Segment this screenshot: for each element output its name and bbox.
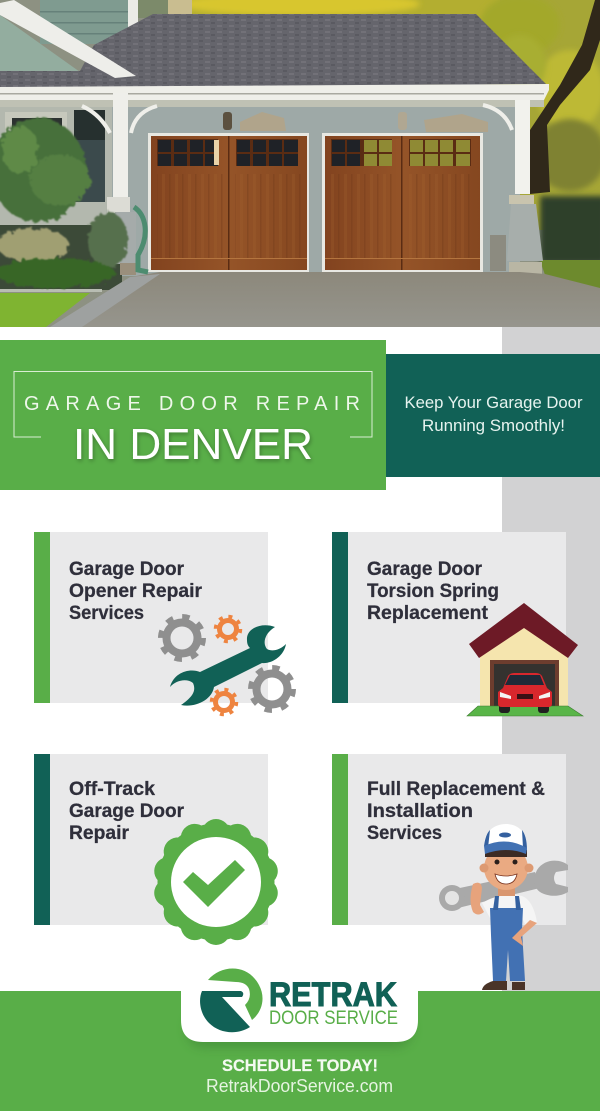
garage door left bbox=[148, 133, 309, 272]
footer band bbox=[0, 991, 600, 1111]
green panel bbox=[0, 340, 386, 490]
photo base bbox=[0, 0, 600, 327]
columns and brackets bbox=[82, 93, 543, 276]
heading: Garage Door bbox=[69, 801, 185, 822]
heading bbox=[69, 559, 203, 624]
neck bbox=[498, 886, 515, 896]
left shrubs and tree bbox=[0, 118, 148, 288]
panel: off-track repair bbox=[34, 754, 281, 945]
driveway bbox=[50, 272, 600, 327]
title banner bbox=[0, 340, 386, 490]
photo: house with two wooden garage doors bbox=[0, 0, 600, 327]
lower left ground bbox=[0, 225, 122, 290]
fascia bbox=[0, 84, 549, 107]
card bbox=[181, 985, 418, 1042]
foliage background bbox=[180, 0, 600, 230]
porch left wall bbox=[0, 100, 112, 235]
gray side strip bbox=[502, 327, 600, 992]
panel: torsion spring bbox=[332, 532, 583, 716]
wrench bbox=[439, 861, 568, 911]
call to action: RetrakDoorService.com bbox=[206, 1076, 393, 1096]
title frame bbox=[14, 372, 372, 437]
accent bar bbox=[34, 754, 50, 925]
accent bar bbox=[34, 532, 50, 703]
accent bar bbox=[332, 532, 348, 703]
panel: full replacement bbox=[332, 754, 566, 925]
title line 1: GARAGE DOOR REPAIR bbox=[24, 393, 360, 415]
driveway edge bbox=[50, 274, 160, 327]
subtitle text bbox=[404, 393, 583, 435]
heading: Services bbox=[69, 603, 144, 624]
cap bbox=[484, 824, 527, 854]
heading: Replacement bbox=[367, 603, 489, 624]
heading bbox=[69, 779, 185, 844]
path line bbox=[0, 289, 102, 292]
roof bbox=[0, 14, 546, 88]
heading: Off-Track bbox=[69, 779, 155, 800]
icon: house with car bbox=[467, 603, 583, 716]
face bbox=[480, 846, 534, 890]
heading: Services bbox=[367, 823, 442, 844]
logo wordmark: DOOR SERVICE bbox=[269, 1007, 398, 1029]
logo wordmark bbox=[269, 976, 398, 1029]
shirt bbox=[482, 895, 537, 928]
heading bbox=[367, 559, 499, 624]
lawn left bbox=[0, 293, 90, 327]
logo wordmark: RETRAK bbox=[269, 976, 397, 1014]
subtitle text: Keep Your Garage Door bbox=[404, 393, 583, 412]
garage door right bbox=[322, 133, 483, 272]
heading: Opener Repair bbox=[69, 581, 203, 602]
green siding bbox=[0, 0, 192, 72]
wall bbox=[100, 100, 520, 276]
heading: Full Replacement & bbox=[367, 779, 545, 800]
panel: opener repair bbox=[34, 532, 294, 714]
mechanic illustration bbox=[439, 824, 568, 990]
lamps and stone patches bbox=[223, 112, 488, 132]
heading: Garage Door bbox=[367, 559, 483, 580]
window bbox=[5, 110, 105, 202]
title line 2: IN DENVER bbox=[73, 420, 313, 469]
logo card bbox=[181, 969, 418, 1048]
subtitle text: Running Smoothly! bbox=[422, 416, 565, 435]
call to action bbox=[206, 1056, 393, 1096]
card shadow bbox=[186, 1010, 413, 1048]
boots bbox=[482, 981, 525, 990]
straps bbox=[493, 896, 521, 910]
logo mark bbox=[200, 969, 263, 1032]
raised hand bbox=[470, 883, 484, 914]
right bushes and lawn bbox=[540, 196, 600, 292]
call to action: SCHEDULE TODAY! bbox=[222, 1056, 378, 1075]
teal subtitle panel bbox=[386, 354, 600, 477]
gable white trim bbox=[0, 0, 136, 78]
heading bbox=[367, 779, 545, 844]
heading: Repair bbox=[69, 823, 130, 844]
arm bbox=[512, 920, 537, 946]
icon: check badge bbox=[151, 819, 281, 945]
heading: Garage Door bbox=[69, 559, 185, 580]
overalls bbox=[490, 908, 525, 981]
icon: gears and wrench bbox=[160, 616, 294, 714]
heading: Installation bbox=[367, 801, 473, 822]
accent bar bbox=[332, 754, 348, 925]
heading: Torsion Spring bbox=[367, 581, 499, 602]
